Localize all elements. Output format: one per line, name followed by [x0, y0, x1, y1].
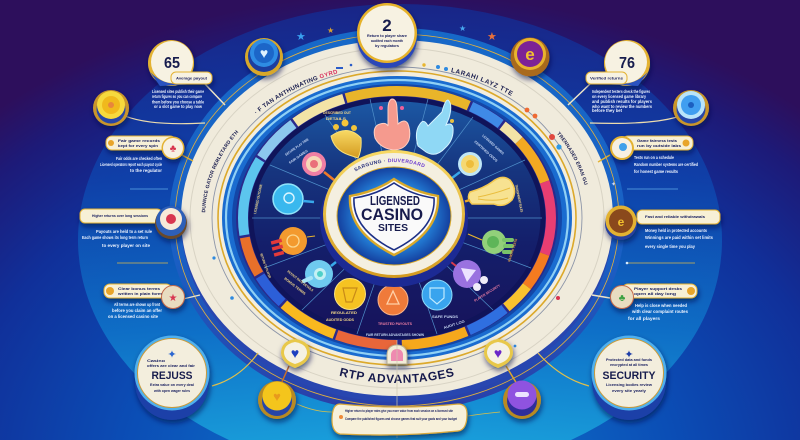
callout: bonus badge: offers are clear and fair — [147, 364, 196, 368]
callout: right row 1 — [598, 136, 698, 189]
icon: cream lobes — [463, 177, 515, 205]
callout: left row 1 — [100, 136, 193, 189]
callout: right row 1: Tests run on a schedule — [634, 155, 675, 160]
icon: center arch pin — [387, 345, 407, 364]
icon: yellow medallion — [334, 278, 366, 310]
callout: left row 3: ★ — [169, 293, 178, 304]
wheel captions: PLAYER SECURITY — [473, 283, 502, 303]
wheel captions: LICENSED GAMES — [481, 134, 505, 156]
icon: purple medallion — [451, 260, 488, 291]
wheel captions: PAYOUT RATE DETAILS — [286, 270, 315, 293]
wheel captions: AUDIT LOG — [443, 319, 466, 330]
callout: left row 1: Fair odds are checked often — [116, 156, 162, 161]
callout: bonus badge: Casino — [147, 359, 166, 363]
icon: heart button: ♥ — [260, 45, 268, 61]
shield — [350, 179, 438, 255]
icon: purple button — [468, 366, 541, 419]
ring dots — [212, 63, 562, 347]
callout: left row 3: before you claim an offer — [112, 308, 162, 313]
callout: 65: them before you choose a table — [152, 100, 205, 104]
callout: right row 3: open all day long — [634, 292, 676, 296]
ring labels: DUNNCE GATOR RERLETARD ETH — [202, 130, 238, 212]
callout: 65: or a slot game to play now — [154, 104, 203, 109]
callout: right row 3: ♣ — [619, 293, 626, 304]
callout: right row 2: e — [618, 215, 625, 229]
callout: right row 3: with clear complaint routes — [631, 309, 689, 314]
ring labels: LARAHI LAYZ TTE — [451, 68, 514, 96]
wheel captions: TRANSPARENT RULES — [514, 184, 524, 213]
callout: top 2: by regulators — [375, 44, 399, 48]
icon: blue shield medallion — [422, 280, 452, 310]
wheel captions: TRUSTED PAYOUTS — [378, 322, 413, 326]
wheel captions: BONUS TERMS — [283, 277, 307, 296]
outer ring — [169, 28, 625, 412]
icon: pink hand — [374, 99, 410, 150]
callout: left row 3: on a licensed casino site — [108, 314, 159, 319]
callout: 76: who want to review the numbers — [591, 104, 653, 109]
stars: ✦ — [611, 181, 616, 188]
callout: right row 3: Help is close when needed — [635, 303, 687, 308]
callout: left row 1: Fair game records — [118, 139, 160, 143]
callout: 76 — [568, 40, 653, 113]
callout: left row 2 — [80, 206, 187, 263]
wheel captions: RETURN TO PLAYER — [259, 253, 272, 279]
outer glow disk — [78, 4, 722, 440]
callout: security badge: SECURITY — [602, 370, 656, 382]
callout: right row 2: every single time you play — [645, 244, 696, 249]
callout: bonus badge: REJUSS — [152, 370, 192, 382]
callout: left row 2: Payouts are held to a set rule — [96, 229, 153, 234]
callout: left row 3: written in plain form — [117, 292, 162, 296]
callout: 65: return figures so you can compare — [152, 94, 202, 99]
callout: security badge: every site yearly — [612, 389, 646, 393]
wheel captions: FAIR GAMES — [288, 148, 309, 165]
blue inner rings — [222, 76, 572, 360]
icon: yellow acorn — [331, 120, 361, 158]
icon: blue hand — [416, 100, 454, 154]
callout: 76: Independent testers check the figures — [592, 89, 651, 94]
callout: 65: Average payout — [176, 76, 208, 80]
callout: right row 1: Random number systems are certified — [634, 162, 698, 167]
icon: gold coin button: ♥ — [273, 389, 281, 404]
callout: left row 1: to the regulator — [130, 168, 162, 173]
callout: right row 1: for honest game results — [634, 169, 679, 174]
callout: right row 1: run by outside labs — [637, 144, 681, 148]
callout: right row 3 — [592, 284, 697, 321]
callout: right row 3: for all players — [628, 316, 661, 321]
callout: 65: 65 — [164, 55, 180, 72]
callout: 76: and publish results for players — [592, 99, 653, 104]
callout: security badge: encrypted at all times — [610, 363, 648, 367]
callout: left row 3: Clear bonus terms — [118, 287, 160, 291]
wheel captions: DETAILS — [326, 117, 347, 121]
stars: ★ — [487, 31, 497, 43]
callout: bottom note: Higher return to player rates give you more value from each session on a licensed site — [345, 409, 453, 413]
icon: purple heart pin: ♥ — [494, 345, 502, 361]
icon: gold coin button — [258, 366, 332, 419]
wheel captions: LICENSED OUTCOME — [253, 183, 263, 214]
callout: 65 — [148, 40, 225, 109]
icon: blue heart pin — [281, 339, 310, 368]
center hub — [320, 150, 468, 287]
hub title: LIGENSED — [370, 193, 420, 208]
callout: 76: before they bet — [592, 108, 623, 113]
callout: top 2: audited each month — [371, 39, 403, 43]
wheel captions: CERTIFIED ODDS — [473, 140, 499, 163]
icon: blue button right — [590, 90, 709, 126]
callout: top 2: 2 — [382, 16, 392, 35]
icon: cyan teapot — [304, 260, 336, 288]
stars: ★ — [327, 26, 334, 35]
icon: yellow button left — [93, 90, 205, 126]
stars: ★ — [296, 31, 306, 43]
callout: 76: 76 — [619, 55, 635, 72]
icon: pink lollipop — [302, 152, 334, 180]
callout: 76: on every licensed game library — [592, 94, 647, 99]
callout: 76: Verified returns — [590, 76, 623, 80]
callout: top 2: Return to player share — [367, 34, 407, 38]
callout: security badge: Licensing bodies review — [606, 383, 652, 387]
wheel captions: REGULATED — [331, 311, 358, 315]
callout: security badge: Protected data and funds — [606, 358, 652, 362]
hub label: SARGUNG · DIUVERDARD — [354, 158, 425, 172]
wheel captions: DESCRIBED OUT — [323, 111, 352, 115]
center hub: CASINO — [361, 205, 423, 224]
stars — [296, 24, 616, 188]
callout: bottom note: Compare the published figures and choose games that suit your goals and your budget — [345, 417, 458, 421]
callout: right row 2: Winnings are paid within set limits — [645, 235, 714, 240]
callout: right row 3: Player support desks — [634, 287, 682, 291]
callout: bonus badge: Extra value on every deal — [150, 383, 194, 387]
callout: right row 2 — [605, 206, 720, 264]
icon: e button: e — [525, 45, 535, 64]
callout: bonus badge: with open wager rules — [153, 389, 190, 393]
callout: left row 3: All terms are shown up front — [114, 302, 160, 307]
icon: yellow knob — [452, 152, 482, 178]
heading: RTP advantages: RTP ADVANTAGES — [340, 368, 454, 383]
icon: purple heart pin — [484, 339, 513, 368]
callout: right row 1: Game fairness tests — [637, 139, 677, 143]
icon: blue heart pin: ♥ — [291, 345, 299, 361]
callout: left row 1: kept for every spin — [118, 144, 158, 148]
callout: left row 1: ♣ — [170, 144, 177, 154]
callout: left row 3 — [104, 284, 200, 319]
callout: left row 2: Higher returns over long sessions — [92, 214, 148, 218]
wheel captions: SAFE FUNDS — [432, 315, 459, 319]
callout: left row 2: to every player on site — [102, 243, 151, 248]
callout: 65: Licensed sites publish their game — [152, 89, 205, 94]
icon: orange medallion — [378, 285, 408, 315]
icon: green medallion — [468, 230, 514, 254]
icon: e button — [510, 38, 550, 76]
wheel captions: RANDOM TESTS — [507, 238, 519, 262]
ring labels — [202, 68, 588, 383]
wheel captions: AUDITED ODDS — [326, 318, 355, 322]
center hub: SITES — [378, 223, 408, 234]
callout: right row 2: Money held in protected accounts — [645, 228, 708, 233]
icon: cyan medallion — [273, 184, 314, 214]
callout: security badge: ✦ — [624, 349, 634, 361]
callout: left row 1: Licensed operators report each payout cycle — [100, 162, 162, 167]
wheel captions — [253, 111, 524, 337]
stars: ★ — [459, 24, 466, 33]
wheel captions: SECURE PLAY TIME — [284, 137, 310, 157]
icon: orange striped medallion — [271, 227, 315, 257]
callout: right row 2: Fast and reliable withdrawals — [645, 215, 705, 219]
callout: left row 2: Each game shows its long term return — [82, 235, 148, 240]
callout: bonus badge — [134, 336, 258, 420]
wheel captions: FAIR RETURN ADVANTAGES SHOWN — [366, 333, 425, 337]
ring labels: · F TAN ANTHUNATING GYRD — [255, 70, 338, 113]
callout: top 2 — [357, 3, 417, 68]
icon: heart button — [245, 38, 283, 76]
coloured ring segments — [243, 91, 551, 345]
callout: security badge — [538, 336, 666, 420]
callout: bonus badge: ✦ — [167, 349, 177, 361]
ring labels: TRENNASED ERAN GU — [558, 132, 588, 185]
panel: dark wheel — [249, 97, 545, 339]
callout: bottom note — [332, 340, 467, 438]
